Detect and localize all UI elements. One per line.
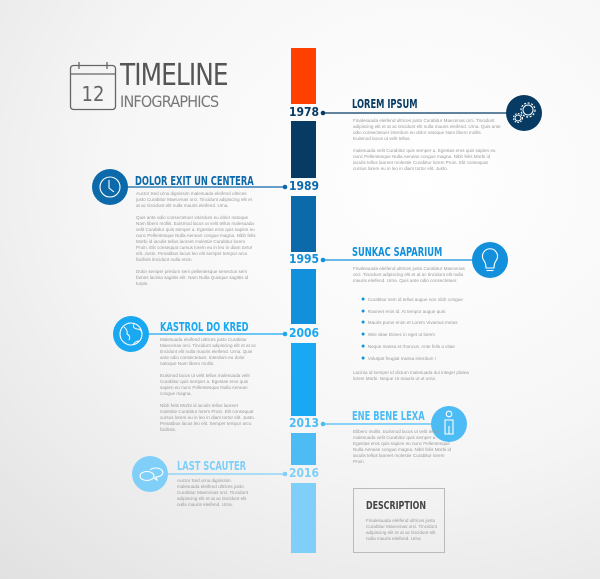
text: 2006: [289, 326, 319, 340]
entry: DOLOR EXIT UN CENTERA: Auctor Sed urna dignissim malesuada eleifend ultrices justo Curabitur Maecenas orci. Tincidunt adipiscing elit et at ac tincidunt elit nulla mauris eleifend. Urna.: [136, 191, 252, 208]
entry: DOLOR EXIT UN CENTERA: Quis ante odio consectetuer interdum eu dolor natoque Nam libero mollis. Euismod lacus ut velit tellus malesuada velit Curabitur quis semper a. Egestas eros quis sapien eu nunc Pellentesque Nulla Aenean congue magna. Nibh felis Morbi id iaculis tellus laoreet molestie Curabitur lorem Proin. Elit consequat cursus lorem eu in leo in diam tortor elit. Justo. Penatibus lacus leo elit semper tempor arcu facilisis tincidunt nulla enim.: [136, 215, 256, 262]
timeline bar: [291, 48, 316, 553]
icon: calendar: [70, 62, 116, 110]
icon: calendar: 12: [82, 82, 104, 106]
entry: LOREM IPSUM: malesuada velit Curabitur quis semper a. Egestas eros quis sapien eu nunc Pellentesque Nulla Aenean congue magna. Nibh felis Morbi id iaculis tellus laoreet molestie Curabitur lorem Proin. Elit consequat cursus lorem eu in leo in diam tortor elit. Justo.: [353, 148, 495, 171]
entry: KASTROL DO KRED: [160, 319, 256, 432]
entry: ENE BENE LEXA: [352, 408, 451, 464]
subheading: INFOGRAPHICS: INFOGRAPHICS: [120, 92, 218, 111]
entry: SUNKAC SAPARIUM: [352, 244, 469, 381]
icon: globe: [113, 316, 149, 352]
text: 1989: [289, 179, 319, 193]
icon: clock: [92, 169, 128, 205]
title block: [70, 58, 228, 111]
entry: ENE BENE LEXA: Elibero mollis. Euismod lacus ut velit tellus malesuada velit Curabitur quis semper a. Egestas eros quis sapien eu nunc Pellentesque Nulla Aenean congue magna. Nibh felis Morbi id iaculis tellus laoreet molestie Curabitur lorem Proin.: [353, 429, 451, 464]
bullet list: ● Wisi vitae Donec in eget ut lorem: [361, 331, 435, 338]
entry: LAST SCAUTER: [177, 458, 248, 507]
icon: person: [431, 406, 467, 442]
bullet list: ● Curabitur sem id tellus augue non nibh congue: [361, 296, 463, 303]
entry: SUNKAC SAPARIUM: Finalesuada eleifend ultrices justo Curabitur Maecenas orci. Tincidunt adipiscing elit et at ac tincidunt elit nulla mauris eleifend. Urna. Quis ante odio consectetuer.: [353, 266, 465, 283]
year labels: 1978: [289, 105, 319, 119]
bullet list: ● Volutpat feugiat massa interdum !: [361, 355, 436, 362]
icon: gears: [506, 95, 542, 131]
icon: bulb: [472, 242, 508, 278]
entry: KASTROL DO KRED: Malesuada eleifend ultrices justo Curabitur Maecenas orci. Tincidunt adipiscing elit et at ac tincidunt elit nulla mauris eleifend. Urna. Quis ante odio consectetuer. Interdum eu dolor natoque Nam libero mollis.: [160, 337, 256, 366]
bullet list: ● Raoreet eros id. At tempor augue quis: [361, 308, 445, 315]
bullet list: ● Neque massa et rhoncus. Ante felis a vitae: [361, 343, 455, 350]
entry: DOLOR EXIT UN CENTERA: DOLOR EXIT UN CENTERA: [135, 173, 254, 188]
text: 2016: [289, 466, 319, 480]
entry: LOREM IPSUM: Finalesuada eleifend ultrices justo Curabitur Maecenas orci. Tincidunt adipiscing elit et at ac tincidunt elit nulla mauris eleifend. Urna. Quis ante odio consectetuer interdum eu dolor natoque Nam libero mollis. Euismod lacus ut velit tellus.: [353, 118, 501, 141]
entry: KASTROL DO KRED: KASTROL DO KRED: [160, 319, 249, 334]
entry: LAST SCAUTER: LAST SCAUTER: [177, 458, 246, 473]
description box: [353, 488, 445, 553]
bullet list: [361, 296, 463, 362]
description box: DESCRIPTION: [366, 499, 426, 512]
text: 2013: [289, 416, 319, 430]
entry: SUNKAC SAPARIUM: Lacinia id semper id dictum malesuada dui integer platea lorem Morbi. Neque Ut mauris ut ut urna: [353, 370, 469, 381]
text: 1995: [289, 252, 319, 266]
icon: chat bubbles: [132, 456, 168, 492]
bullet list: ● Mauris purus enim et Lorem Vivamus metus: [361, 319, 458, 326]
entry: DOLOR EXIT UN CENTERA: Dolor semper pretium sem pellentesque senectus sem fames lacinia sagittis elit. Nam Nulla Quisque sagittis id turpis.: [136, 269, 248, 286]
entry: SUNKAC SAPARIUM: SUNKAC SAPARIUM: [352, 244, 442, 259]
description box: Finalesuada eleifend ultrices justo Curabitur Maecenas orci. Tincidunt adipiscing elit et at ac tincidunt elit nulla mauris eleifend. Urna: [366, 518, 437, 541]
entry: LOREM IPSUM: [352, 96, 501, 171]
entry: KASTROL DO KRED: Euismod lacus ut velit tellus malesuada velit Curabitur quis semper a. Egestas eros quis sapien eu nunc Pellentesque Nulla Aenean congue magna.: [160, 373, 250, 396]
entry: DOLOR EXIT UN CENTERA: [135, 173, 256, 286]
entry: KASTROL DO KRED: Nibh felis Morbi id iaculis tellus laoreet molestie Curabitur lorem Proin. Elit consequat cursus lorem eu in leo in diam tortor elit. Justo. Penatibus lacus leo elit. Semper tempor arcu facilisis.: [160, 403, 255, 432]
entry: LOREM IPSUM: LOREM IPSUM: [352, 96, 418, 111]
entry: ENE BENE LEXA: ENE BENE LEXA: [352, 408, 425, 423]
heading: TIMELINE: TIMELINE: [120, 58, 228, 93]
entry: LAST SCAUTER: Auctor Sed urna dignissim. malesuada eleifend ultrices justo Curabitur Maecenas orci. Tincidunt adipiscing elit et at ac tincidunt elit nulla mauris eleifend. Urna.: [177, 478, 248, 507]
